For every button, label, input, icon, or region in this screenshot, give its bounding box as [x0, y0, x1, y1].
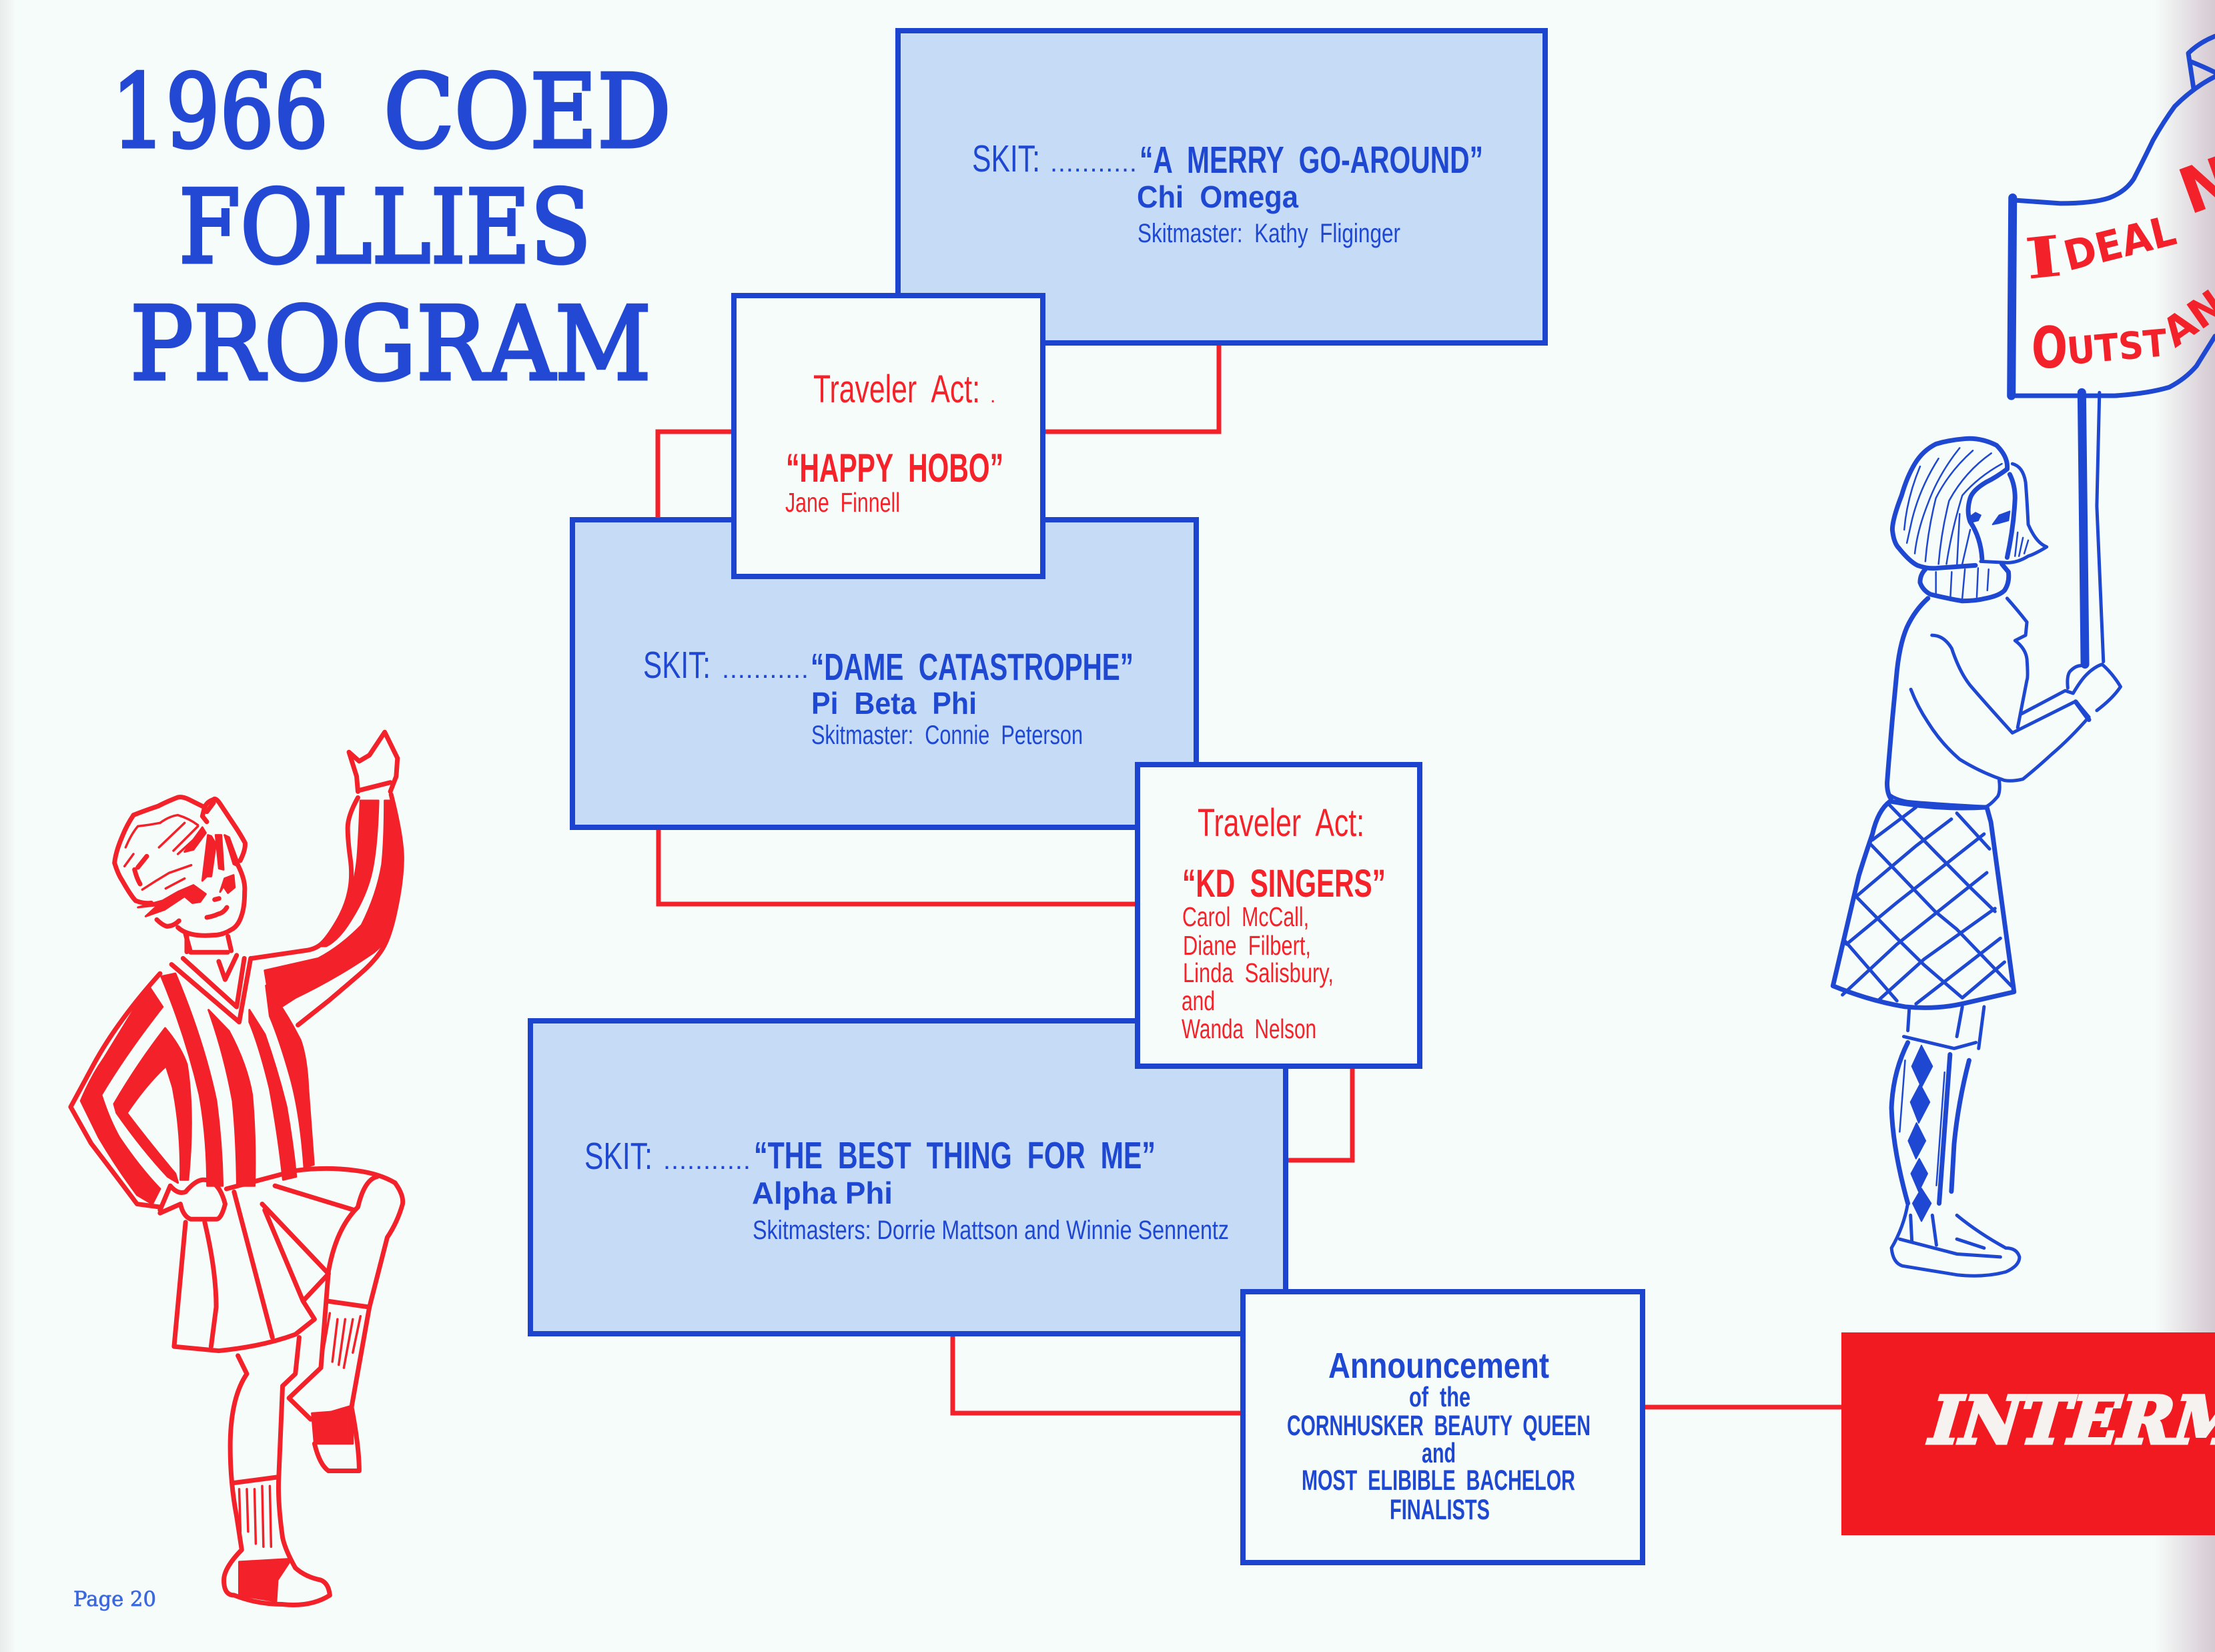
- flag lettering: O: [2032, 315, 2068, 382]
- flag lettering: UTST: [2066, 322, 2169, 374]
- traveler 2 performers: and: [1182, 985, 1215, 1016]
- traveler 1 title: “HAPPY HOBO”: [786, 446, 1003, 490]
- traveler 2 performers: Diane Filbert,: [1183, 930, 1311, 961]
- connector: Happy Hobo to skit 2: [658, 432, 733, 518]
- skit 3 skitmasters: Skitmasters: Dorrie Mattson and Winnie Sennentz: [753, 1216, 1229, 1245]
- skit 2 group: Pi Beta Phi: [811, 686, 977, 721]
- panel: announcement: [1243, 1292, 1643, 1563]
- protest flag: [2012, 36, 2215, 396]
- skit 1 title: “A MERRY GO-AROUND”: [1140, 139, 1483, 181]
- skit 3 label: SKIT:: [584, 1135, 652, 1178]
- traveler 2 performers: Linda Salisbury,: [1183, 957, 1334, 988]
- skit 3 leader dots: ...........: [663, 1146, 751, 1175]
- girl's body and clothes: [71, 732, 403, 1605]
- skit 1 group: Chi Omega: [1137, 179, 1298, 214]
- skirt: [174, 1168, 395, 1351]
- traveler 2 title: “KD SINGERS”: [1182, 862, 1386, 905]
- title: 1966: [111, 53, 328, 171]
- shoe: [1891, 1204, 2020, 1276]
- connector: announcement to intermission: [1643, 1405, 1842, 1409]
- traveler 1 performer: Jane Finnell: [785, 487, 900, 518]
- hand on hip: [160, 1180, 225, 1219]
- announcement text: CORNHUSKER BEAUTY QUEEN: [1287, 1410, 1591, 1442]
- skit 2 label: SKIT:: [643, 644, 711, 687]
- skit 3 group: Alpha Phi: [752, 1176, 893, 1210]
- raised leg: [321, 1177, 403, 1407]
- flag lettering: DEAL: [2059, 206, 2181, 281]
- title: PROGRAM: [130, 285, 651, 403]
- sweater hem: [1888, 781, 2000, 807]
- girl's head and hair: [115, 797, 245, 952]
- announcement text: of the: [1409, 1381, 1470, 1412]
- title: COED: [384, 53, 671, 171]
- connector: KD Singers to skit 3: [1288, 1068, 1352, 1160]
- raised sock and shoe: [289, 1301, 370, 1471]
- traveler 1 stray dot: .: [990, 385, 995, 407]
- announcement text: MOST ELIBIBLE BACHELOR: [1302, 1465, 1575, 1497]
- traveler 2 label: Traveler Act:: [1198, 801, 1364, 845]
- illustration: red cheerleader girl: [71, 732, 403, 1605]
- collar: [171, 934, 251, 1022]
- traveler 1 label: Traveler Act:: [813, 368, 980, 411]
- connector: skit 1 to Happy Hobo: [1043, 346, 1219, 432]
- traveler 2 performers: Wanda Nelson: [1182, 1013, 1316, 1044]
- title: FOLLIES: [179, 168, 591, 286]
- girl's upper body and pole: [1887, 392, 2120, 807]
- skirt plaid: [1843, 804, 2012, 1003]
- standing leg and shoe: [224, 1338, 330, 1605]
- flag lettering: [2022, 142, 2215, 382]
- skit 3 title: “THE BEST THING FOR ME”: [754, 1134, 1156, 1177]
- panel: skit Dame Catastrophe: [572, 520, 1196, 827]
- panel: intermission banner: [1841, 1332, 2215, 1535]
- announcement text: FINALISTS: [1390, 1494, 1490, 1526]
- sock diamonds: [1908, 1046, 1932, 1221]
- skirt outline: [1833, 801, 2014, 1007]
- girl's skirt and legs: [1833, 801, 2020, 1276]
- page number: Page 20: [73, 1587, 156, 1611]
- traveler 2 performers: [1182, 901, 1334, 1044]
- pole: [2082, 392, 2085, 665]
- skit 1 skitmaster: Skitmaster: Kathy Fliginger: [1138, 219, 1400, 248]
- raised sleeve: [252, 795, 402, 1025]
- skit 1 label: SKIT:: [972, 137, 1040, 180]
- collar: [1920, 564, 2009, 601]
- announcement heading: Announcement: [1328, 1346, 1549, 1386]
- skit 2 skitmaster: Skitmaster: Connie Peterson: [811, 721, 1083, 750]
- face side hair: [1981, 464, 2047, 562]
- panel: skit The Best Thing For Me: [530, 1021, 1286, 1334]
- connector: skit 3 to announcement: [953, 1336, 1243, 1413]
- announcement text: [1287, 1381, 1591, 1526]
- legs and sock: [1903, 1007, 1984, 1048]
- traveler 2 performers: Carol McCall,: [1182, 901, 1309, 932]
- connector: skit 2 to KD Singers: [658, 830, 1137, 904]
- flag lettering: I: [2022, 223, 2065, 292]
- illustration: blue girl with sign: [1833, 36, 2215, 1276]
- skit 2 leader dots: ...........: [722, 655, 809, 684]
- body stripes: [161, 973, 223, 1186]
- sleeve and hand: [1911, 635, 2089, 781]
- raised hand: [349, 732, 398, 791]
- sweater: [1887, 598, 1928, 799]
- panel: traveler act Happy Hobo: [734, 296, 1043, 576]
- panel: skit A Merry Go-Around: [898, 31, 1545, 343]
- eyes: [1970, 512, 1981, 522]
- skit 2 title: “DAME CATASTROPHE”: [811, 646, 1134, 689]
- left arm outline and stripes: [71, 973, 180, 1207]
- title: [111, 53, 671, 403]
- announcement text: and: [1422, 1437, 1456, 1469]
- skit 1 leader dots: ...........: [1050, 148, 1137, 177]
- panel: traveler act KD Singers: [1138, 765, 1420, 1066]
- hair: [1892, 438, 2008, 568]
